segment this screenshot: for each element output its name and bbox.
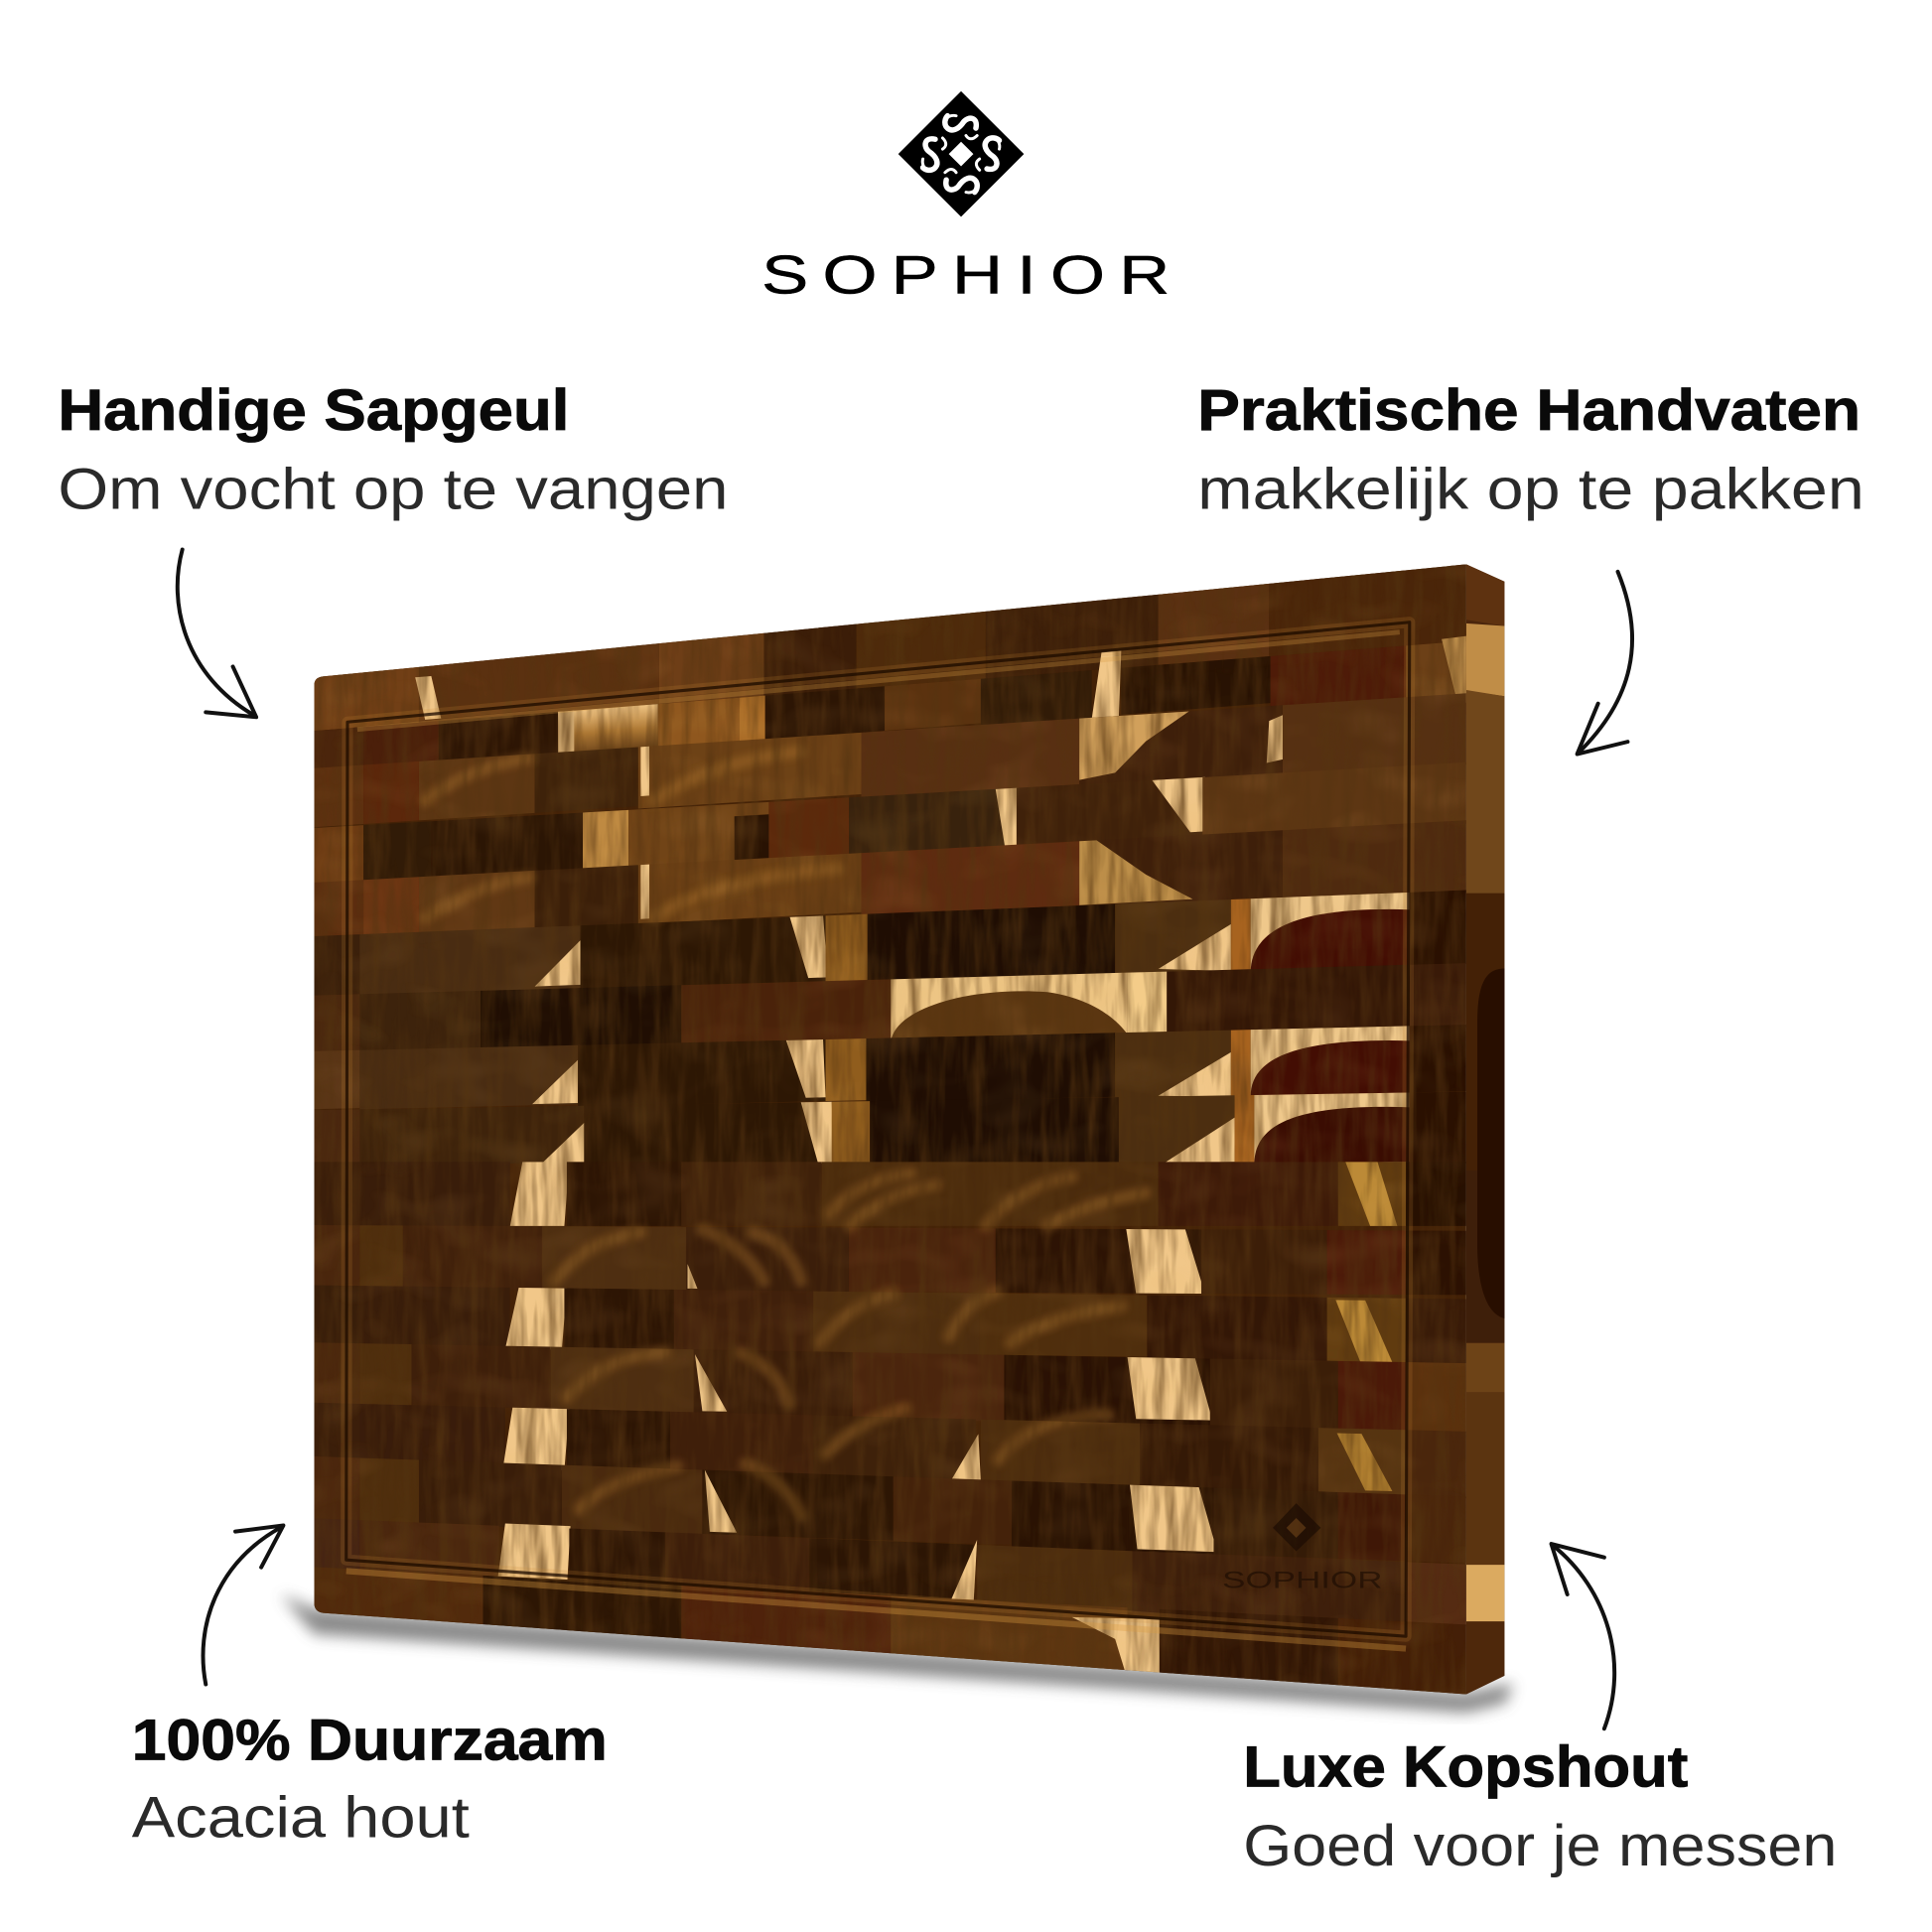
- callout: Handige Sapgeul: Om vocht op te vangen: [58, 458, 728, 522]
- arrow: bottom right: [1552, 1544, 1614, 1728]
- handle recess: [1477, 968, 1504, 1318]
- callout: Praktische Handvaten: makkelijk op te pakken: [1197, 458, 1864, 522]
- row m: [314, 1403, 1467, 1498]
- row j: [314, 1225, 1467, 1295]
- board side face: [1449, 564, 1504, 1694]
- row e: [314, 890, 1466, 994]
- swirl streaks in the wood: [425, 752, 1146, 1516]
- icon: diamond emblem: [898, 91, 1024, 216]
- row a: [314, 645, 1406, 767]
- row k: [314, 1286, 1467, 1363]
- callout: Luxe Kopshout: [1243, 1735, 1837, 1878]
- callout: Handige Sapgeul: [58, 378, 728, 522]
- row g: [314, 1025, 1467, 1118]
- row d: [314, 820, 1466, 936]
- callout: Praktische Handvaten: Praktische Handvaten: [1197, 378, 1861, 443]
- bottom border row: [314, 1567, 1467, 1785]
- juice groove: [346, 622, 1410, 1649]
- arrow: top right: [1578, 572, 1632, 755]
- cutting board: [281, 517, 1513, 1785]
- row h: [314, 1092, 1467, 1181]
- row n: [314, 1456, 1467, 1564]
- callout: Luxe Kopshout: Luxe Kopshout: [1243, 1735, 1688, 1800]
- arrow: top left: [178, 550, 256, 717]
- wordmark: SOPHIOR: [761, 245, 1170, 305]
- row l: [314, 1342, 1467, 1433]
- row i: [314, 1162, 1467, 1226]
- engraved logo on board: SOPHIOR: [1222, 1568, 1382, 1593]
- row o: [314, 1513, 1467, 1626]
- logo: Sophior diamond and wordmark: [761, 91, 1170, 305]
- engraved logo on board: [1222, 1503, 1382, 1593]
- board front face with end-grain blocks: [314, 564, 1466, 1694]
- callout: 100% Duurzaam: Acacia hout: [132, 1785, 470, 1850]
- arrow: bottom left: [204, 1525, 283, 1685]
- fine grain texture: [308, 554, 1472, 1701]
- callout: Praktische Handvaten: [1197, 378, 1864, 522]
- row f: [314, 963, 1467, 1059]
- row b: [314, 693, 1467, 840]
- callout: Luxe Kopshout: Goed voor je messen: [1243, 1814, 1837, 1878]
- callout: Handige Sapgeul: Handige Sapgeul: [58, 378, 569, 443]
- callout: 100% Duurzaam: 100% Duurzaam: [132, 1708, 608, 1772]
- top border row: [314, 564, 1466, 731]
- wood grain texture: [308, 554, 1472, 1701]
- row c: [314, 762, 1467, 890]
- board shadow: [281, 1594, 1513, 1713]
- callout: 100% Duurzaam: [132, 1708, 608, 1850]
